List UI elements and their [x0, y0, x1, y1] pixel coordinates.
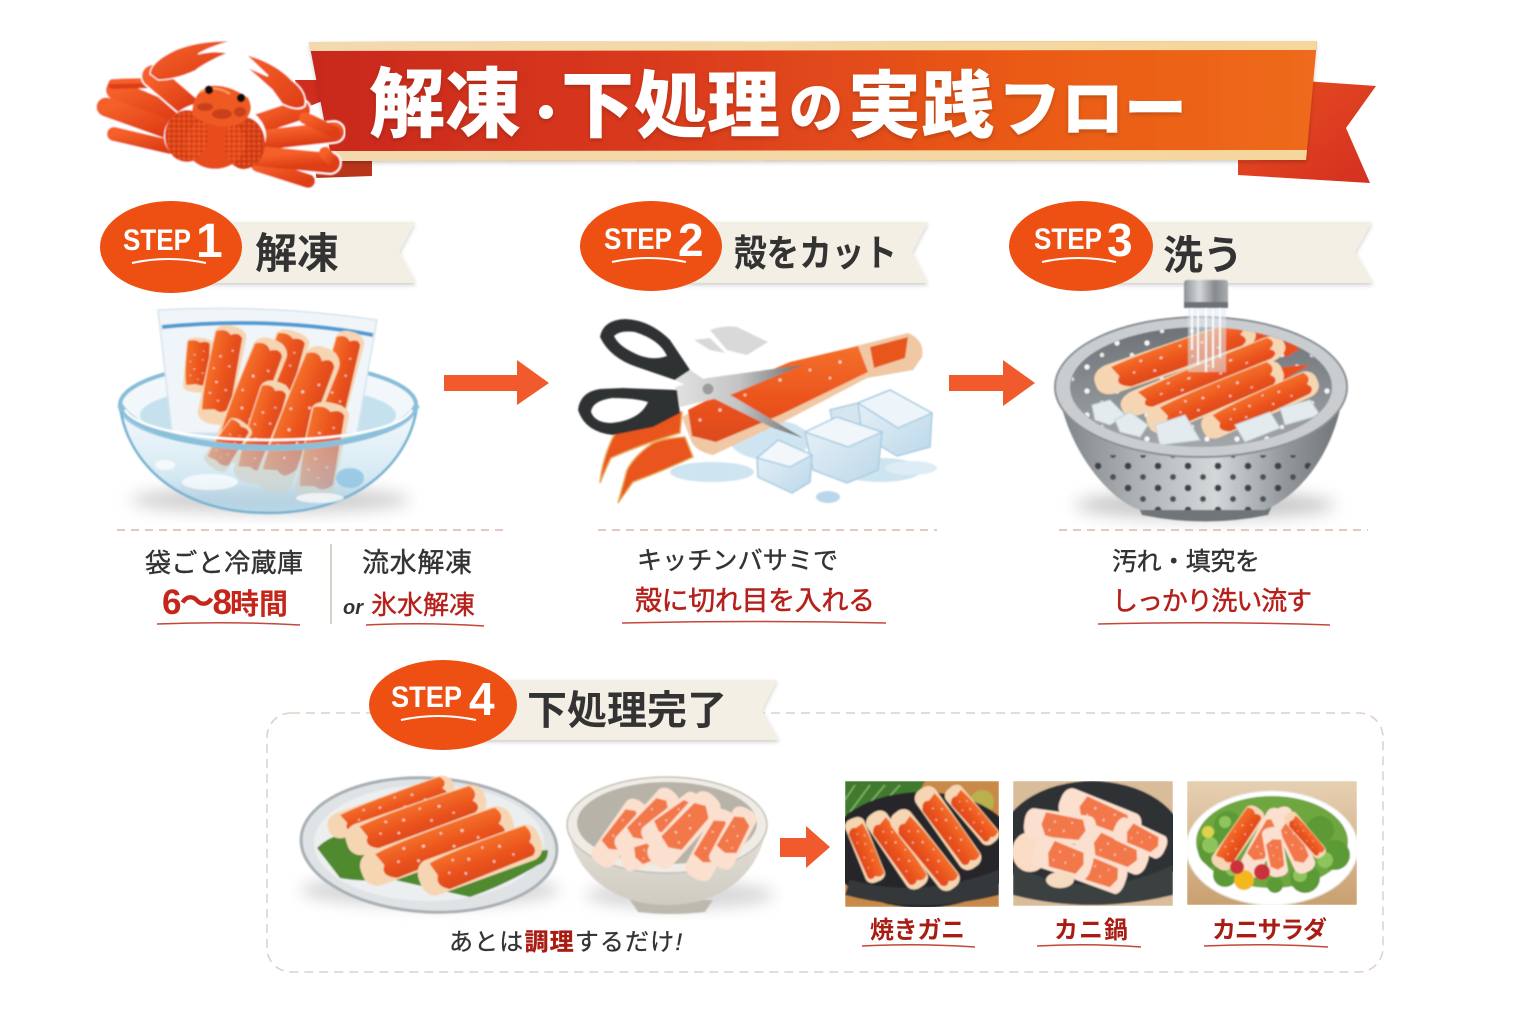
label: grilled crab: 焼きガニ — [870, 917, 965, 944]
banner gold stripes — [309, 41, 1317, 51]
colander foot — [1133, 495, 1277, 522]
label: crab salad: カニサラダ — [1212, 916, 1327, 944]
text: just cook: あとは調理するだけ! — [449, 929, 682, 956]
illustration: plate of prepared crab legs — [298, 771, 560, 919]
title text: 解凍 — [369, 63, 521, 148]
step 1 text: 氷水解凍 — [371, 590, 475, 620]
crab leg — [682, 333, 922, 455]
step 3 badge text: STEP — [1034, 223, 1102, 256]
step 4 badge — [369, 660, 517, 750]
ice cubes — [757, 390, 932, 493]
step 3 header: 3 — [1107, 214, 1133, 266]
step 1 label: 解凍 — [255, 230, 339, 277]
step 3 header — [1009, 201, 1373, 291]
scissor blades — [675, 370, 803, 438]
step 1 ribbon — [200, 222, 416, 283]
title banner — [295, 41, 1376, 183]
title text: 下処理 — [561, 66, 780, 147]
step 4 header: 4 — [469, 673, 495, 725]
illustration: bowl of prepared crab meat — [567, 777, 775, 914]
step 2 header — [580, 201, 928, 291]
crab legs in colander — [1091, 326, 1320, 445]
running water — [1188, 306, 1226, 372]
dark plate — [845, 792, 999, 907]
step 3 ribbon — [1110, 222, 1373, 283]
step 4 badge text: STEP — [391, 681, 462, 714]
banner right tail — [1238, 80, 1376, 183]
arrow: step 1 to step 2 — [444, 360, 549, 405]
greenery — [845, 781, 925, 820]
panel: step 4 dashed frame — [267, 713, 1383, 972]
step 3 text: 汚れ・填究を — [1112, 548, 1260, 576]
crab left claw — [150, 41, 231, 80]
faucet — [1184, 280, 1228, 308]
colander bowl — [1060, 400, 1342, 510]
bag zip stripe — [162, 323, 373, 335]
crab legs — [106, 76, 334, 181]
salad bowl — [1186, 791, 1358, 905]
title text: の — [789, 79, 843, 139]
step 3 text — [1059, 530, 1368, 625]
label: crab hot pot: カニ鍋 — [1054, 917, 1128, 944]
tomatoes — [1234, 870, 1254, 890]
crab legs on plate — [324, 772, 458, 842]
icon: crab — [106, 41, 334, 181]
crab eyes — [205, 86, 213, 94]
hot pot dish — [1013, 781, 1173, 886]
step 4 header — [369, 660, 779, 750]
lettuce — [1198, 811, 1350, 893]
step 4 label: 下処理完了 — [527, 689, 727, 733]
step 1 text: 6～8時間 — [162, 583, 288, 622]
step 4 ribbon — [480, 680, 779, 740]
crab meat — [1013, 832, 1042, 874]
banner left fold — [315, 157, 372, 178]
illustration: crab legs in bag in glass bowl — [120, 308, 417, 513]
crab body — [164, 101, 266, 171]
running or ice water thawing: 流水解凍 — [362, 548, 472, 578]
title text: フロー — [998, 75, 1187, 145]
step 3 text: しっかり洗い流す — [1112, 586, 1312, 616]
step 1 text — [117, 530, 505, 626]
step 2 badge — [580, 201, 722, 291]
illustration: colander under running water — [1055, 280, 1350, 522]
step 2 ribbon — [680, 222, 928, 283]
scissor handles — [600, 319, 690, 380]
bowl back and water — [120, 362, 416, 448]
grilled crab legs — [843, 815, 887, 885]
illustration: scissors cutting crab leg on ice — [578, 319, 937, 503]
step 2 header: 2 — [678, 214, 704, 266]
banner main band — [309, 41, 1317, 161]
crab legs — [1210, 804, 1266, 872]
ghost shell pieces — [694, 326, 768, 355]
step 3 badge — [1009, 201, 1153, 291]
colander rim — [1055, 317, 1347, 457]
step 2 text — [598, 530, 937, 623]
step 1 header — [100, 201, 416, 293]
crab arm — [153, 76, 188, 106]
photo: crab hot pot — [1013, 781, 1173, 906]
meat pieces — [682, 805, 742, 885]
arrow: prepared to dishes — [780, 826, 830, 868]
zipper bag — [158, 308, 377, 433]
melted puddles — [670, 420, 937, 503]
crab right claw — [245, 54, 305, 109]
photo: grilled crab — [845, 781, 999, 907]
step 3 label: 洗う — [1163, 234, 1243, 278]
step 2 label: 殻をカット — [734, 233, 897, 274]
arrow: step 2 to step 3 — [949, 360, 1035, 406]
crab claws — [600, 411, 682, 483]
photo: crab salad — [1186, 781, 1358, 905]
label: crab hot pot — [1037, 917, 1141, 947]
step 1 text: or — [343, 597, 364, 619]
title text: ・ — [521, 86, 571, 142]
step 1 header: 1 — [196, 215, 223, 268]
title text: 実践 — [848, 66, 994, 147]
step 2 text: キッチンバサミで — [637, 547, 838, 575]
step 2 badge text: STEP — [604, 223, 672, 256]
ice in colander — [1092, 400, 1320, 445]
step 1 badge text: STEP — [123, 224, 191, 257]
crab legs in bag — [182, 323, 367, 505]
bowl front glass — [120, 405, 417, 513]
step 1 badge — [100, 201, 242, 293]
refrigerator thawing: 袋ごと冷蔵庫 — [145, 548, 303, 578]
shiso leaf — [317, 835, 548, 897]
step 2 text: 殻に切れ目を入れる — [635, 586, 875, 616]
